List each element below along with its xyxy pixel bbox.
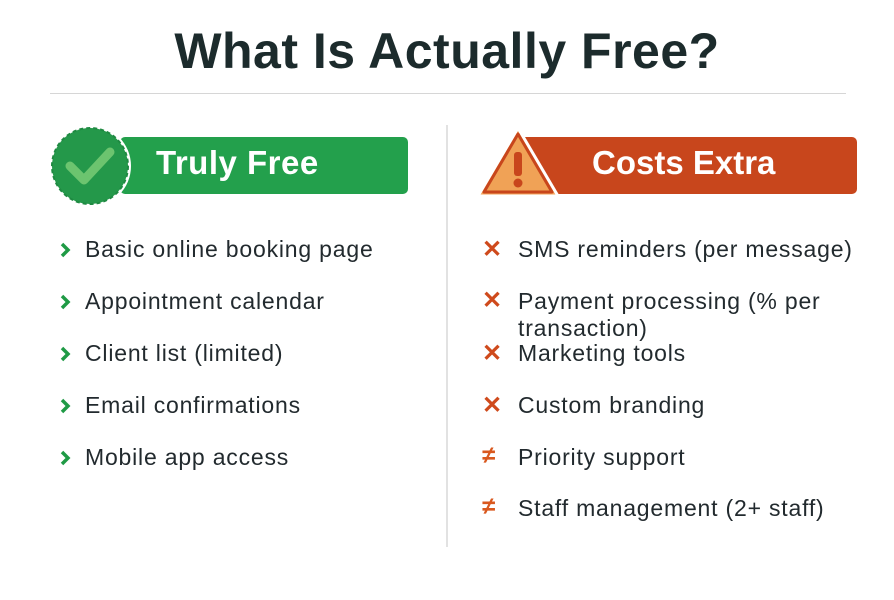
list: free items: Mobile app access bbox=[85, 444, 289, 470]
list: extra cost items: Marketing tools bbox=[518, 340, 686, 366]
panel: costs extra header bbox=[480, 131, 857, 194]
heading: Truly Free: Truly Free bbox=[156, 144, 319, 181]
list: extra cost items: ✕ bbox=[482, 236, 502, 263]
list: extra cost items: Custom branding bbox=[518, 392, 705, 418]
list: extra cost items: transaction) bbox=[518, 315, 648, 341]
list: extra cost items: SMS reminders (per message) bbox=[518, 236, 853, 262]
banner green bbox=[120, 137, 408, 194]
heading: Costs Extra: Costs Extra bbox=[592, 144, 775, 181]
list: extra cost items: ≠ bbox=[482, 493, 495, 520]
list: extra cost items: Priority support bbox=[518, 444, 685, 470]
banner red bbox=[520, 137, 857, 194]
icon: check badge bbox=[51, 127, 131, 205]
list: free items bbox=[60, 236, 374, 470]
list: free items: Appointment calendar bbox=[85, 288, 325, 314]
panel: truly free header bbox=[51, 127, 408, 205]
title: What Is Actually Free? bbox=[174, 23, 720, 79]
list: extra cost items: ✕ bbox=[482, 392, 502, 419]
list: extra cost items bbox=[482, 236, 853, 521]
list: extra cost items: Payment processing (% per bbox=[518, 288, 821, 314]
list: extra cost items: ✕ bbox=[482, 287, 502, 314]
list: extra cost items: ✕ bbox=[482, 340, 502, 367]
list: extra cost items: ≠ bbox=[482, 442, 495, 469]
list: extra cost items: Staff management (2+ staff) bbox=[518, 495, 824, 521]
list: free items: Client list (limited) bbox=[85, 340, 283, 366]
list: free items: Basic online booking page bbox=[85, 236, 374, 262]
list: free items: Email confirmations bbox=[85, 392, 301, 418]
icon: warning triangle bbox=[480, 131, 558, 194]
